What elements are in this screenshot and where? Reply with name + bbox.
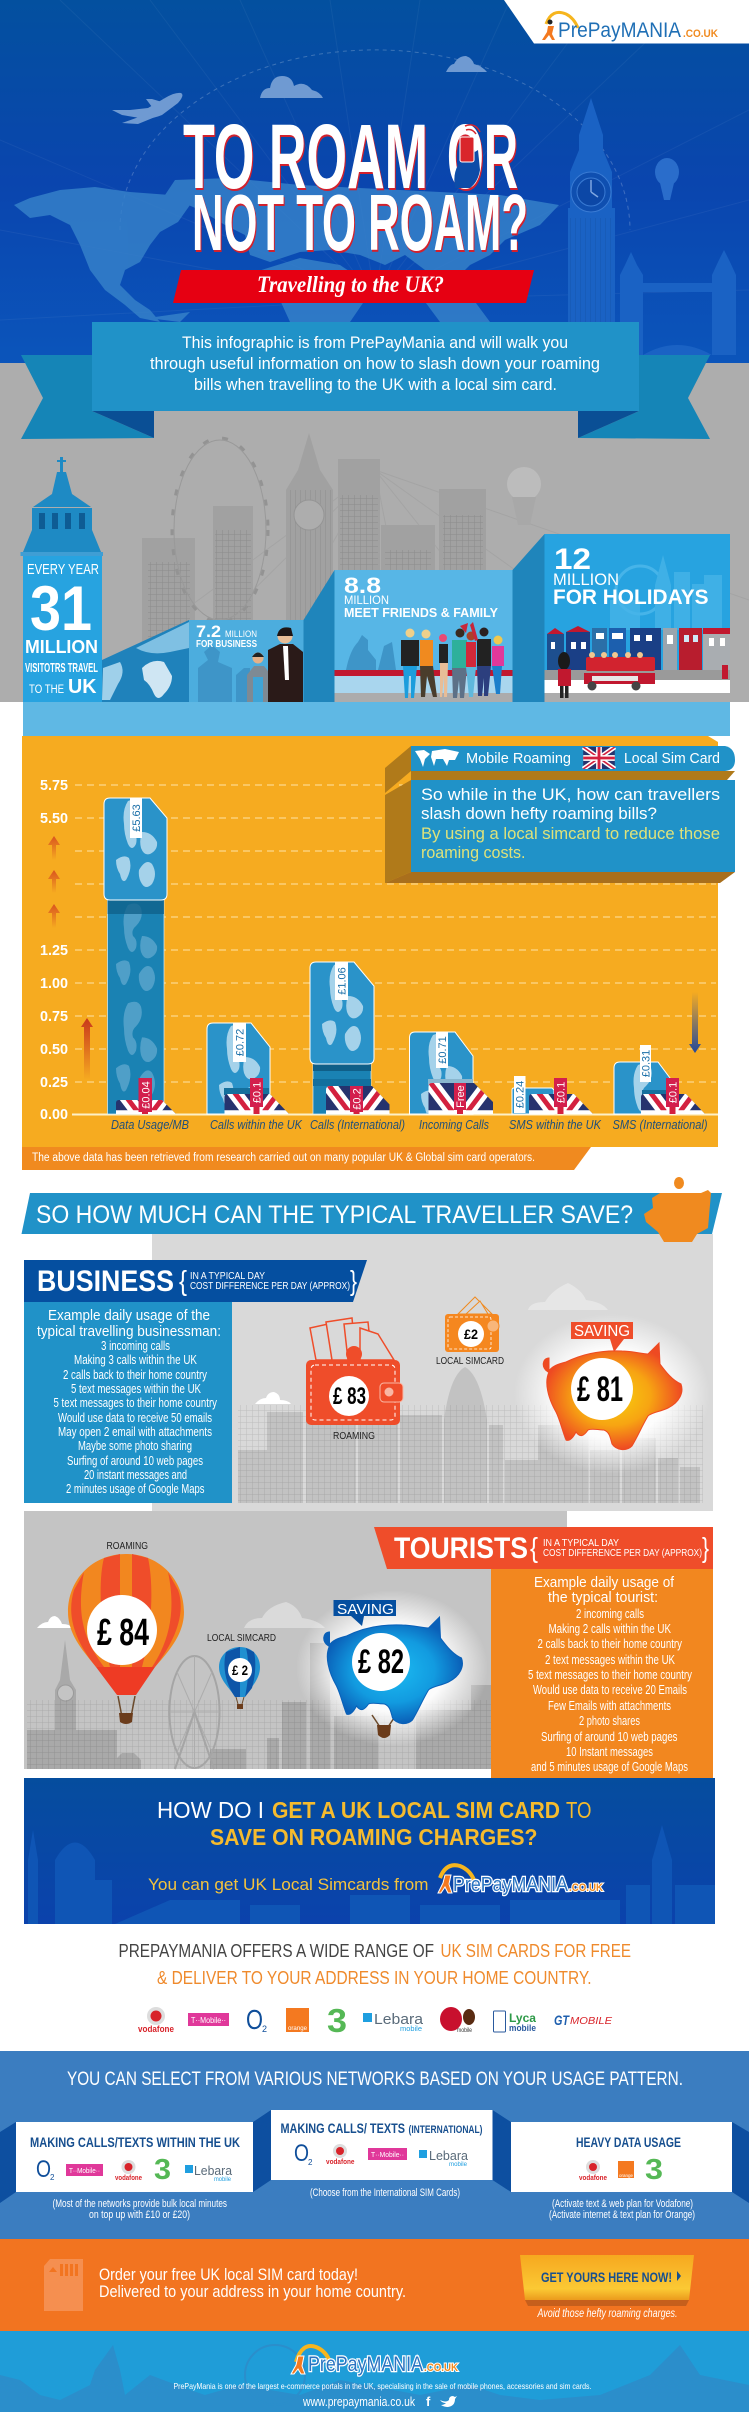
- tourists usage list: Surfing of around 10 web pages: [541, 1730, 678, 1744]
- section heading: [22, 1193, 722, 1234]
- business usage list: 20 instant messages and: [84, 1468, 187, 1482]
- panel: visitors tower: MILLION: [25, 637, 98, 657]
- vodafone: vodafone: [138, 2024, 174, 2034]
- panel: business visitors: FOR BUSINESS: [196, 639, 257, 650]
- lyca: mobile: [509, 2023, 536, 2033]
- business usage list: Surfing of around 10 web pages: [67, 1454, 203, 1468]
- icon: orange piggy bank: [644, 1177, 711, 1242]
- business header: }: [350, 1265, 357, 1296]
- tourists usage list: 2 incoming calls: [576, 1607, 644, 1621]
- logo: PrePayMANIA: [453, 1874, 569, 1896]
- card: within the UK: 3: [154, 2154, 171, 2186]
- gt mobile: MOBILE: [570, 2016, 612, 2027]
- captions: (Activate internet & text plan for Orange): [549, 2209, 695, 2221]
- roaming balloon: ROAMING: [106, 1540, 148, 1552]
- panel: business savings background: [152, 1234, 713, 1511]
- free sim statement: PREPAYMANIA OFFERS A WIDE RANGE OF: [118, 1941, 434, 1961]
- business header: COST DIFFERENCE PER DAY (APPROX): [190, 1280, 350, 1292]
- business usage list: 2 minutes usage of Google Maps: [66, 1482, 204, 1496]
- bar: calls within UK: [206, 1022, 289, 1114]
- tourists usage list: and 5 minutes usage of Google Maps: [531, 1760, 688, 1774]
- o2: O: [246, 2004, 263, 2035]
- panel: order call to action: [0, 2239, 749, 2331]
- card: within the UK: mobile: [214, 2177, 232, 2183]
- bar: data usage: £5.63: [131, 804, 143, 832]
- tourists header: }: [702, 1532, 709, 1563]
- category labels: SMS (International): [612, 1117, 708, 1132]
- virgin: mobile: [457, 2028, 473, 2034]
- card: international: 2: [308, 2158, 313, 2167]
- tourists usage list: Would use data to receive 20 Emails: [533, 1683, 687, 1697]
- card: within the UK: MAKING CALLS/TEXTS WITHIN THE UK: [30, 2134, 240, 2150]
- tourists usage list: the typical tourist:: [548, 1589, 658, 1606]
- panel: tourists savings background: [24, 1511, 567, 1769]
- panel: how to get a sim: You can get UK Local Simcards from: [148, 1875, 428, 1894]
- icon: group of friends: [401, 622, 504, 698]
- y axis labels: [40, 777, 68, 1123]
- panel: visitors tower: [20, 457, 103, 702]
- business saving pig: SAVING: [574, 1323, 630, 1340]
- lyca: [494, 2011, 536, 2033]
- big ben and tower bridge: [568, 98, 736, 355]
- y axis labels: 5.75: [40, 777, 68, 794]
- grid lines: [75, 785, 716, 1082]
- category labels: Calls (International): [310, 1117, 405, 1132]
- icon: red bus: [584, 652, 655, 690]
- tourists usage list: [491, 1569, 713, 1778]
- grey skyline: [142, 433, 541, 702]
- card: heavy data: orange: [619, 2173, 633, 2178]
- virgin: [440, 2007, 475, 2034]
- business header: BUSINESS: [37, 1265, 174, 1298]
- business usage list: 5 text messages to their home country: [54, 1396, 218, 1410]
- source note: The above data has been retrieved from research carried out on many popular UK & Global sim card operators.: [32, 1152, 535, 1164]
- intro ribbon: through useful information on how to slash down your roaming: [150, 354, 600, 373]
- logo: [291, 2346, 458, 2376]
- card: within the UK: [16, 2122, 253, 2192]
- panel: friends and family: MEET FRIENDS & FAMILY: [344, 605, 498, 620]
- tourists saving pig: [296, 1590, 488, 1746]
- title: OR: [447, 106, 518, 208]
- panel: how to get a sim: TO: [566, 1797, 592, 1823]
- tourists usage list: 10 Instant messages: [566, 1745, 653, 1759]
- header background: [0, 0, 749, 702]
- card: international: T··Mobile··: [371, 2150, 404, 2159]
- title: [183, 106, 528, 267]
- intro ribbon: bills when travelling to the UK with a local sim card.: [194, 375, 557, 394]
- o2: 2: [262, 2024, 267, 2034]
- card: heavy data: HEAVY DATA USAGE: [576, 2134, 681, 2150]
- tourists saving pig: £ 82: [358, 1643, 404, 1681]
- tourists header: COST DIFFERENCE PER DAY (APPROX): [543, 1547, 702, 1559]
- captions: [52, 2187, 695, 2221]
- tower top: [20, 457, 103, 556]
- legend: Mobile Roaming: [466, 750, 571, 767]
- houses: [547, 626, 730, 670]
- category labels: Data Usage/MB: [111, 1117, 189, 1132]
- local simcard wallet: [436, 1297, 504, 1367]
- local simcard wallet: £2: [464, 1326, 478, 1342]
- bar: sms within UK: £0.1: [556, 1082, 568, 1103]
- lyca: Lyca: [509, 2011, 536, 2025]
- category labels: Incoming Calls: [419, 1117, 489, 1132]
- y axis labels: 0.50: [40, 1041, 68, 1058]
- panel: holidays: FOR HOLIDAYS: [553, 586, 708, 609]
- panel: business visitors: MILLION: [225, 629, 257, 640]
- business usage list: 2 calls back to their home country: [63, 1368, 208, 1382]
- lebara: mobile: [400, 2026, 422, 2033]
- y axis labels: 1.00: [40, 975, 68, 992]
- bar: calls international: [310, 962, 390, 1114]
- card: within the UK: 2: [50, 2173, 55, 2182]
- legend: [411, 746, 735, 771]
- logo: .CO.UK: [424, 2362, 458, 2374]
- t-mobile: T··Mobile··: [191, 2016, 226, 2025]
- source note: [22, 1147, 591, 1170]
- tourists usage list: 5 text messages to their home country: [528, 1668, 693, 1682]
- vodafone: [138, 2007, 174, 2034]
- roaming wallet: £ 83: [333, 1383, 366, 1410]
- business usage list: May open 2 email with attachments: [58, 1425, 212, 1439]
- business usage list: Would use data to receive 50 emails: [58, 1411, 212, 1425]
- local simcard balloon: LOCAL SIMCARD: [207, 1632, 276, 1644]
- panel: how to get a sim: SAVE ON ROAMING CHARGES?: [210, 1824, 538, 1850]
- bar: sms international: £0.1: [668, 1082, 680, 1103]
- tourists header: [374, 1527, 713, 1569]
- panel: friends and family: MILLION: [344, 593, 389, 607]
- card: within the UK: Lebara: [194, 2163, 233, 2178]
- business usage list: 3 incoming calls: [101, 1339, 170, 1353]
- business usage list: Maybe some photo sharing: [78, 1439, 192, 1453]
- card: within the UK: O: [36, 2156, 51, 2183]
- tourists usage list: Example daily usage of: [534, 1574, 675, 1591]
- panel: visitors tower: EVERY YEAR: [27, 561, 99, 578]
- card: international: vodafone: [326, 2157, 354, 2166]
- tourists header: TOURISTS: [394, 1532, 528, 1565]
- t-mobile: [188, 2013, 229, 2026]
- free sim statement: & DELIVER TO YOUR ADDRESS IN YOUR HOME COUNTRY.: [157, 1968, 592, 1988]
- bar: sms within UK: £0.24: [514, 1081, 526, 1108]
- business usage list: 5 text messages within the UK: [71, 1382, 202, 1396]
- card: international: mobile: [449, 2162, 468, 2168]
- intro ribbon: [21, 322, 710, 439]
- business usage list: Making 3 calls within the UK: [74, 1353, 198, 1367]
- social icons: [426, 2394, 457, 2409]
- question box: By using a local simcard to reduce those: [421, 824, 720, 843]
- arrows: [48, 836, 701, 1080]
- category labels: Calls within the UK: [210, 1117, 303, 1132]
- intro ribbon: This infographic is from PrePayMania and will walk you: [182, 333, 568, 352]
- captions: (Most of the networks provide bulk local minutes: [52, 2198, 227, 2210]
- light blue strip: [23, 702, 730, 736]
- tourists saving pig: SAVING: [337, 1601, 394, 1618]
- roaming balloon: £ 84: [97, 1612, 149, 1654]
- panel: friends and family: [304, 570, 512, 702]
- button: GET YOURS HERE NOW!: [541, 2269, 672, 2285]
- question box: So while in the UK, how can travellers: [421, 785, 720, 804]
- panel: visitors tower: 31: [30, 574, 92, 644]
- social icons: f: [426, 2394, 431, 2409]
- business usage list: typical travelling businessman:: [37, 1323, 221, 1340]
- panel: visitors tower: UK: [68, 676, 97, 698]
- logo: [438, 1865, 603, 1896]
- tourists header: IN A TYPICAL DAY: [543, 1537, 619, 1549]
- tourists usage list: Making 2 calls within the UK: [548, 1622, 672, 1636]
- bar: incoming calls: £0.71: [437, 1036, 449, 1064]
- card: heavy data: 3: [645, 2154, 663, 2186]
- logo: .CO.UK: [569, 1882, 603, 1894]
- legend and question box: [385, 746, 735, 883]
- logo top right: .CO.UK: [683, 28, 718, 40]
- captions: on top up with £10 or £20): [89, 2209, 190, 2221]
- icon: royal guard: [558, 652, 571, 698]
- card: heavy data: [511, 2122, 732, 2192]
- y axis labels: 0.00: [40, 1106, 68, 1123]
- tourists usage list: 2 text messages within the UK: [545, 1653, 676, 1667]
- y axis labels: 5.50: [40, 810, 68, 827]
- subtitle banner: [173, 270, 534, 303]
- panel: how to get a sim: HOW DO I: [157, 1797, 264, 1823]
- category labels: [111, 1117, 708, 1132]
- tourists usage list: 2 calls back to their home country: [538, 1637, 683, 1651]
- lebara: Lebara: [374, 2011, 424, 2028]
- bar: data usage: [104, 798, 176, 1114]
- bar: calls within UK: £0.1: [252, 1082, 264, 1103]
- roaming balloon: [68, 1540, 184, 1724]
- title: TO ROAM: [183, 106, 428, 208]
- panel: order call to action: Order your free UK local SIM card today!: [99, 2265, 358, 2284]
- business usage list: [24, 1302, 232, 1503]
- panel: cost chart: [22, 736, 718, 1170]
- connectors: [0, 2110, 749, 2203]
- panel: order call to action: Avoid those hefty roaming charges.: [537, 2306, 678, 2320]
- panel: how to get a sim: GET A UK LOCAL SIM CARD: [272, 1797, 560, 1823]
- logo top right: [504, 0, 749, 44]
- bar: sms international: £0.31: [640, 1050, 652, 1077]
- question box: slash down hefty roaming bills?: [421, 804, 657, 823]
- bar: data usage: £0.04: [140, 1081, 152, 1109]
- panel: networks by usage: [0, 2051, 749, 2239]
- panel: visitors tower: TO THE: [29, 684, 64, 696]
- panel: holidays: 12: [554, 543, 591, 576]
- bar: incoming calls: [409, 1032, 493, 1114]
- gt mobile: GT: [554, 2012, 570, 2028]
- business saving pig: £ 81: [577, 1370, 623, 1409]
- question box: [411, 780, 735, 872]
- icon: sim card: [44, 2259, 83, 2311]
- panel: how to get a sim: [24, 1778, 715, 1924]
- business usage list: Example daily usage of the: [48, 1307, 210, 1324]
- panel: order call to action: Delivered to your address in your home country.: [99, 2282, 406, 2301]
- logo top right: PrePayMANIA: [558, 19, 681, 42]
- card: international: Lebara: [429, 2148, 469, 2163]
- local simcard balloon: £ 2: [232, 1662, 248, 1678]
- icon: hand with phone: [454, 125, 480, 188]
- section heading: SO HOW MUCH CAN THE TYPICAL TRAVELLER SAVE?: [36, 1201, 633, 1229]
- bar: calls international: £1.06: [336, 967, 348, 995]
- logo: PrePayMANIA: [308, 2353, 423, 2376]
- card: within the UK: T··Mobile··: [69, 2166, 100, 2175]
- y axis labels: 1.25: [40, 942, 68, 959]
- orange: orange: [288, 2026, 308, 2032]
- gt mobile: [554, 2012, 612, 2028]
- card: international: (INTERNATIONAL): [408, 2124, 483, 2136]
- panel: footer: PrePayMania is one of the largest e-commerce portals in the UK, specialising in the sale of mobile phones, accessories and sim cards.: [174, 2381, 592, 2391]
- business header: IN A TYPICAL DAY: [190, 1270, 265, 1282]
- local simcard balloon: [207, 1632, 276, 1709]
- panel: business visitors: [189, 620, 304, 702]
- card: international: O: [294, 2140, 309, 2167]
- captions: (Activate text & web plan for Vodafone): [552, 2198, 693, 2210]
- roaming wallet: [306, 1318, 403, 1442]
- question box: roaming costs.: [421, 843, 526, 862]
- network logos row: [138, 2002, 612, 2039]
- bar: sms international: [614, 1045, 705, 1114]
- captions: (Choose from the International SIM Cards): [310, 2187, 460, 2199]
- business header: {: [179, 1265, 187, 1296]
- panel: holidays: [512, 534, 730, 702]
- panel: footer: www.prepaymania.co.uk: [302, 2395, 416, 2409]
- clouds and plane: [112, 56, 487, 124]
- y axis labels: 0.25: [40, 1074, 68, 1091]
- panel: globe ramp: [102, 620, 189, 702]
- bar: calls within UK: £0.72: [234, 1029, 246, 1056]
- tourists header: {: [530, 1532, 538, 1563]
- panel: footer: [0, 2331, 749, 2412]
- bar: sms within UK: [512, 1076, 593, 1114]
- icon: business people: [247, 627, 303, 702]
- card: within the UK: vodafone: [115, 2173, 142, 2182]
- three: 3: [327, 2002, 347, 2039]
- roaming wallet: ROAMING: [333, 1431, 375, 1442]
- card: international: [271, 2110, 492, 2180]
- button: [520, 2255, 694, 2306]
- card: heavy data: vodafone: [579, 2173, 607, 2182]
- world map: [14, 178, 559, 322]
- tourists usage list: 2 photo shares: [579, 1714, 640, 1728]
- panel: friends and family: 8.8: [344, 573, 381, 598]
- y axis labels: 0.75: [40, 1008, 68, 1025]
- bar: calls international: £0.2: [352, 1088, 364, 1110]
- panel: visitors tower: VISITOTRS TRAVEL: [25, 661, 98, 675]
- panel: business visitors: 7.2: [196, 622, 221, 641]
- orange: [286, 2008, 309, 2032]
- bar: incoming calls: Free: [455, 1085, 467, 1108]
- subtitle banner: Travelling to the UK?: [257, 272, 444, 297]
- card: international: MAKING CALLS/ TEXTS: [280, 2120, 405, 2136]
- tourists usage list: Few Emails with attachments: [548, 1699, 671, 1713]
- legend: Local Sim Card: [624, 750, 720, 767]
- business header: [24, 1260, 367, 1302]
- panel: holidays: MILLION: [553, 570, 619, 589]
- lebara: [363, 2011, 424, 2033]
- category labels: SMS within the UK: [509, 1117, 602, 1132]
- local simcard wallet: LOCAL SIMCARD: [436, 1356, 504, 1367]
- business saving pig: [514, 1314, 710, 1474]
- free sim statement: [118, 1941, 631, 1988]
- free sim statement: UK SIM CARDS FOR FREE: [440, 1941, 631, 1961]
